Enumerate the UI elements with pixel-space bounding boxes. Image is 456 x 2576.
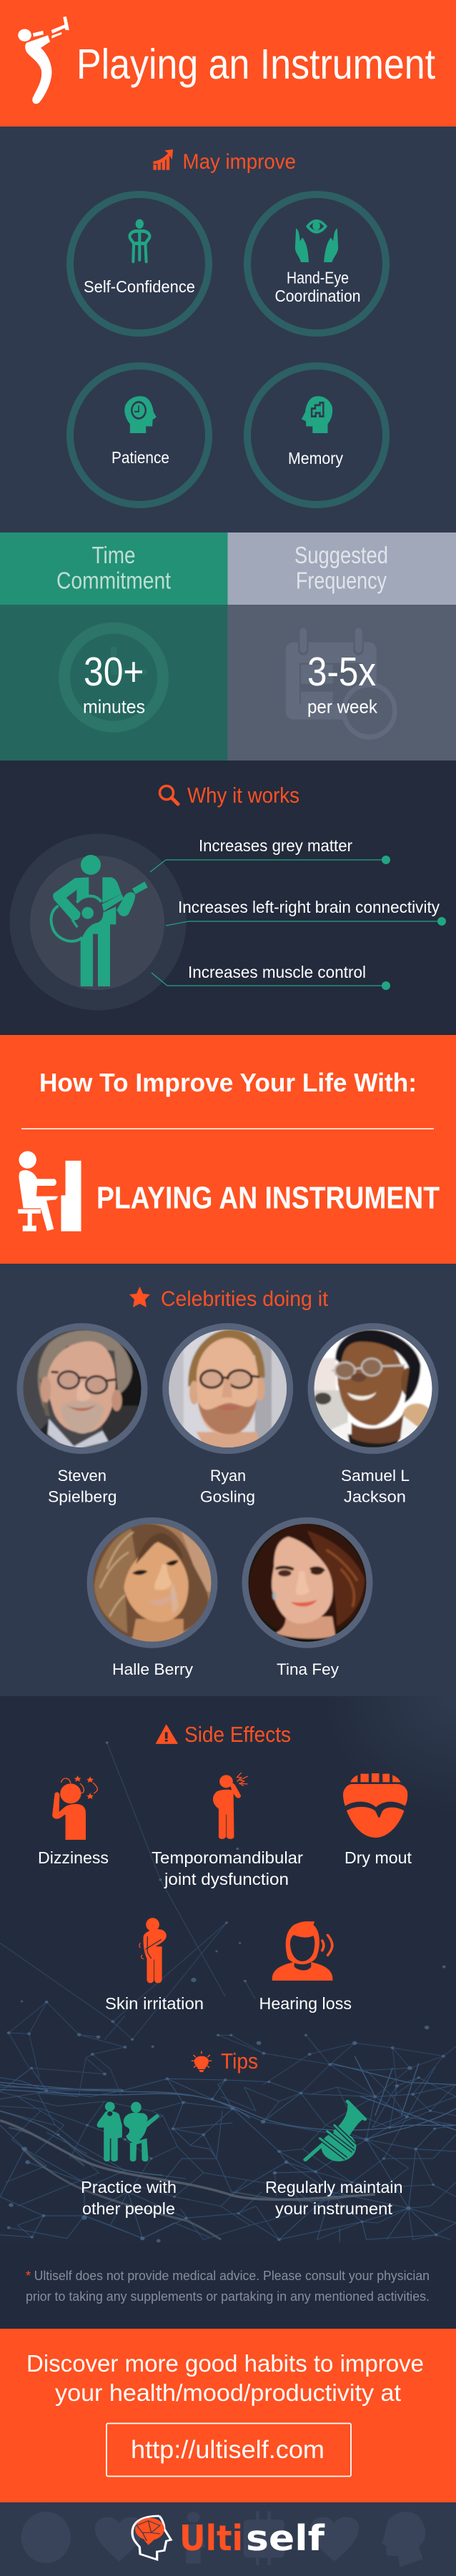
label: Memory: [288, 449, 343, 467]
logo: wordmark: Ulti: [179, 2518, 243, 2559]
name: Steven Spielberg: [48, 1467, 117, 1505]
callout: grey matter: [150, 836, 390, 872]
text: discover more: Discover more good habits to improve: [26, 2350, 424, 2377]
icon: trumpet player: [18, 16, 69, 104]
icon: hands and eye: [295, 219, 338, 262]
callout: grey matter: Increases grey matter: [199, 836, 352, 855]
icon: scratching person: [139, 1918, 167, 1983]
label: Temporomandibular: [152, 1848, 303, 1867]
name: Ryan Gosling: Gosling: [200, 1488, 255, 1505]
name: Steven Spielberg: Spielberg: [48, 1488, 117, 1505]
benefit: self-confidence: [70, 194, 209, 333]
button: url: http://ultiself.com: [131, 2436, 324, 2464]
portrait: Samuel L Jackson: [311, 1327, 435, 1451]
benefit: patience: [70, 366, 209, 505]
icon: warning triangle: [156, 1725, 177, 1743]
name: Halle Berry: Halle Berry: [112, 1660, 193, 1678]
icon: two musicians: [97, 2102, 160, 2161]
label line two: other people: [82, 2199, 175, 2218]
name: Ryan Gosling: [200, 1467, 255, 1505]
heading line two: Frequency: [296, 568, 387, 593]
icon: head with clock: [124, 396, 157, 433]
icon: calendar watermark: [286, 631, 395, 737]
icon: head with castle: [302, 396, 332, 433]
side effect: temporomandibular joint dysfunction: [152, 1773, 303, 1888]
icon: confident person: [129, 219, 149, 262]
icon: head with sound waves: [272, 1921, 332, 1981]
panel: celebrities: [17, 1287, 439, 1678]
icon: clock watermark: [64, 628, 163, 727]
label line two: joint dysfunction: [164, 1870, 289, 1888]
benefit: hand-eye coordination: [247, 194, 386, 333]
heading: suggested frequency: Suggested: [294, 542, 388, 568]
value: 3-5x: 3-5x: [307, 649, 376, 695]
heading: side effects: Side Effects: [184, 1722, 291, 1747]
header banner: [0, 0, 456, 127]
panel: side effects and tips: [0, 1696, 456, 2329]
disclaimer: [26, 2269, 430, 2304]
label line two: your instrument: [275, 2199, 393, 2218]
heading: why it works: Why it works: [187, 783, 299, 808]
text line two: your health/mood/productivity at: [55, 2379, 401, 2406]
panel: footer: [0, 2502, 456, 2576]
icon: mouth: [343, 1773, 407, 1838]
side effect: dry mouth: [343, 1773, 412, 1867]
panel: may improve: [0, 127, 456, 532]
heading: may improve: May improve: [183, 150, 296, 174]
panel: time commitment: [0, 532, 227, 761]
network background: [0, 1741, 456, 2309]
icon: piano player: [18, 1151, 81, 1232]
label: Patience: [111, 448, 169, 467]
panel: suggested frequency: [227, 532, 456, 761]
label: Dry mout: [345, 1848, 412, 1867]
side effect: dizziness: [38, 1775, 109, 1867]
logo: brain head: [132, 2516, 171, 2560]
heading line two: Commitment: [56, 568, 171, 593]
heading: tips: Tips: [221, 2049, 258, 2074]
icon: star: [129, 1287, 150, 1307]
icon: light bulb: [192, 2051, 212, 2072]
name: Ryan Gosling: Ryan: [210, 1467, 246, 1485]
panel: call to action: [0, 2329, 456, 2502]
callout: muscle control: Increases muscle control: [188, 963, 366, 981]
panel: how to improve banner: [0, 1035, 456, 1264]
value: 30+: 30+: [84, 649, 144, 695]
label: Hearing loss: [259, 1994, 352, 2013]
callout: brain connectivity: [166, 898, 446, 926]
tip: practice with others: [81, 2102, 177, 2218]
unit: minutes: minutes: [83, 696, 145, 718]
disclaimer: prior to taking any supplements or partaking in any mentioned activities.: [26, 2289, 430, 2304]
icon: dizzy person: [52, 1775, 97, 1840]
button: url: [106, 2423, 351, 2476]
side effect: hearing loss: [259, 1921, 352, 2013]
label line two: Coordination: [274, 287, 360, 305]
side effect: skin irritation: [105, 1918, 204, 2013]
label: Self-Confidence: [84, 277, 195, 296]
panel: why it works: [0, 761, 456, 1035]
benefit: memory: [247, 366, 386, 505]
heading: celebrities: Celebrities doing it: [161, 1287, 329, 1311]
label: Hand-Eye: [287, 269, 349, 287]
unit: per week: per week: [307, 696, 378, 718]
logo: wordmark: self: [246, 2518, 325, 2559]
callout: brain connectivity: Increases left-right brain connectivity: [178, 898, 440, 916]
name: Tina Fey: Tina Fey: [277, 1660, 339, 1678]
icon: jaw pain person: [213, 1773, 248, 1839]
icon: trumpet: [305, 2101, 365, 2161]
heading: how to improve: How To Improve Your Life With:: [39, 1068, 417, 1097]
tip: maintain instrument: [265, 2101, 403, 2218]
portrait: Steven Spielberg: [20, 1327, 150, 1451]
disclaimer: Ultiself does not provide medical advice. Please consult your physician: [34, 2269, 430, 2283]
halo circles: [10, 833, 186, 1011]
name: Steven Spielberg: Steven: [57, 1467, 106, 1485]
icon: magnifier: [160, 786, 178, 804]
disclaimer: *: [26, 2269, 31, 2283]
name: Samuel L Jackson: Samuel L: [341, 1467, 410, 1485]
portrait: Halle Berry: [90, 1520, 214, 1645]
callout: muscle control: [152, 963, 390, 990]
label: Regularly maintain: [265, 2178, 403, 2196]
ghost icons: [21, 2511, 425, 2567]
portrait: Ryan Gosling: [166, 1327, 290, 1451]
icon: growth chart: [153, 149, 173, 170]
label: Skin irritation: [105, 1994, 204, 2013]
label: Dizziness: [38, 1848, 109, 1867]
logo: wordmark: [179, 2518, 325, 2559]
name: Samuel L Jackson: [341, 1467, 410, 1505]
icon: guitarist: [51, 855, 148, 986]
label: Practice with: [81, 2178, 177, 2196]
name: Samuel L Jackson: Jackson: [344, 1488, 406, 1505]
heading: time commitment: Time: [91, 542, 136, 568]
portrait: Tina Fey: [245, 1520, 370, 1645]
